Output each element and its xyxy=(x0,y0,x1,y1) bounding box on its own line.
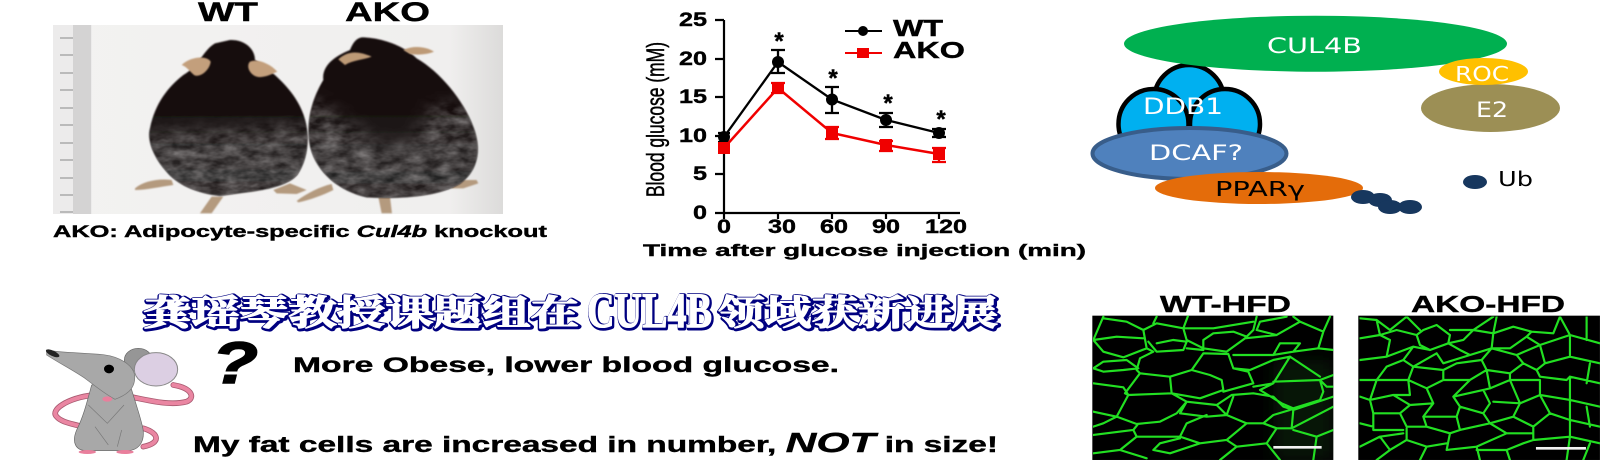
series: WT xyxy=(718,50,946,143)
significance asterisks: * xyxy=(828,65,838,92)
x tick labels: 30 xyxy=(768,217,796,238)
series: AKO xyxy=(718,82,946,162)
legend: WT xyxy=(893,15,943,41)
arms and belly xyxy=(88,405,124,447)
DDB1 subunit circles: DDB1 xyxy=(1143,95,1223,120)
legend: AKO xyxy=(893,37,965,63)
significance asterisks: * xyxy=(774,28,784,55)
y tick labels: 10 xyxy=(679,126,707,147)
ruler xyxy=(53,25,92,214)
ubiquitin key: Ub xyxy=(1498,167,1533,191)
axes xyxy=(715,20,960,219)
significance asterisks: * xyxy=(883,90,893,117)
y tick labels: 0 xyxy=(693,203,707,224)
legend xyxy=(845,15,965,63)
DCAF ellipse xyxy=(1092,128,1286,179)
statement: fat cells: My fat cells are increased in number, NOT in size! xyxy=(193,427,998,458)
inner ear xyxy=(134,353,178,386)
body xyxy=(74,378,143,451)
AKO mouse xyxy=(297,37,487,213)
diagram: CUL4B ubiquitin ligase complex xyxy=(1092,16,1560,214)
headline: 龚瑶琴教授课题组在 xyxy=(144,287,580,337)
panel: WT-HFD micrograph xyxy=(1092,291,1333,460)
photo of two mice xyxy=(53,25,503,214)
headline: 领域获新进展 xyxy=(719,287,999,337)
x tick labels: 0 xyxy=(717,217,731,238)
y tick labels: 5 xyxy=(693,164,708,185)
E2 ellipse: E2 xyxy=(1476,98,1508,122)
question mark: ? xyxy=(212,331,258,396)
head xyxy=(47,350,135,399)
y tick labels xyxy=(679,10,708,224)
feet xyxy=(79,450,96,454)
CUL4B ellipse xyxy=(1124,16,1507,72)
DDB1 subunit circles xyxy=(1118,65,1260,159)
headline: CUL4B xyxy=(588,283,713,339)
x tick labels xyxy=(717,217,967,238)
headline xyxy=(143,282,999,339)
statement: more obese: More Obese, lower blood glucose. xyxy=(293,354,839,377)
y tick labels: 15 xyxy=(679,87,708,108)
scale bar xyxy=(1273,446,1322,449)
y tick labels: 25 xyxy=(679,10,708,31)
ROC ellipse: ROC xyxy=(1455,62,1509,86)
eye xyxy=(104,365,114,373)
E2 ellipse xyxy=(1421,84,1560,132)
PPAR gamma ellipse: PPARγ xyxy=(1215,177,1305,201)
x tick labels: 60 xyxy=(820,217,848,238)
DCAF ellipse: DCAF? xyxy=(1149,141,1243,165)
hands xyxy=(102,396,112,402)
panel: mouse photo comparison xyxy=(53,0,547,241)
x tick labels: 90 xyxy=(872,217,900,238)
panel: AKO-HFD micrograph xyxy=(1358,291,1600,460)
ROC ellipse xyxy=(1439,58,1528,86)
scale bar xyxy=(1536,447,1586,450)
significance asterisks: * xyxy=(936,106,946,133)
chart: blood glucose line chart xyxy=(642,10,1086,260)
headline: 领域获新进展 xyxy=(718,286,998,336)
headline: 龚瑶琴教授课题组在 xyxy=(143,286,579,336)
micrograph xyxy=(1092,315,1333,460)
ubiquitin key xyxy=(1463,167,1533,191)
headline: CUL4B xyxy=(587,282,712,338)
caption: AKO: Adipocyte-specific Cul4b knockout xyxy=(53,222,547,241)
significance asterisks xyxy=(774,28,946,133)
micrograph xyxy=(1358,316,1600,460)
y tick labels: 20 xyxy=(679,49,707,70)
CUL4B ellipse: CUL4B xyxy=(1267,34,1362,58)
x tick labels: 120 xyxy=(925,217,967,238)
PPAR gamma ellipse xyxy=(1155,172,1363,204)
nose xyxy=(45,348,60,359)
WT mouse xyxy=(135,40,317,213)
x axis title: Time after glucose injection (min) xyxy=(643,241,1086,260)
back ear xyxy=(124,348,152,372)
icon: cartoon mouse xyxy=(45,348,191,454)
label: WT-HFD: WT-HFD xyxy=(1160,291,1291,317)
ubiquitin chain xyxy=(1351,190,1422,214)
tail xyxy=(55,385,191,447)
label: AKO-HFD: AKO-HFD xyxy=(1411,291,1565,317)
